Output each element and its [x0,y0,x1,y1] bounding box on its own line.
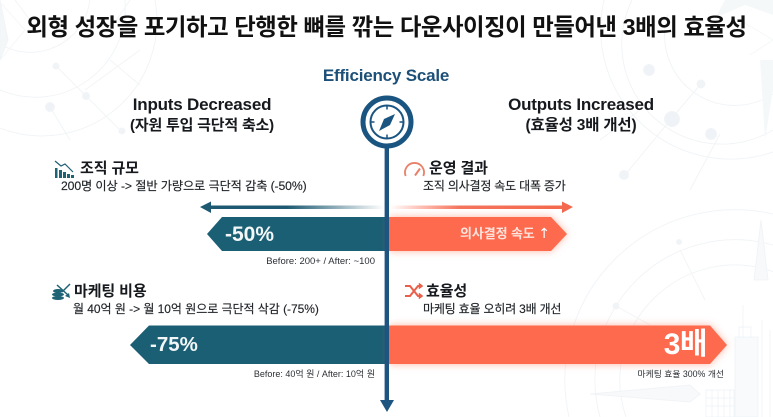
panel header: outputs increased: Outputs Increased [508,95,654,114]
caption: before and after headcount: Before: 200+ / After: ~100 [266,256,375,267]
text: marketing cost detail: 월 40억 원 -> 월 10억 원으로 극단적 삭감 (-75%) [73,302,319,316]
heading: operating results: 운영 결과 [429,160,488,177]
bar label: 3x: 3배 [664,328,707,361]
heading: organisation size: 조직 규모 [80,160,139,177]
title: 외형 성장을 포기하고 단행한 뼈를 깎는 다운사이징이 만들어낸 3배의 효율성 [26,14,747,40]
caption: marketing efficiency 300%: 마케팅 효율 300% 개선 [638,369,724,379]
text: organisation size detail: 200명 이상 -> 절반 가량으로 극단적 감축 (-50%) [61,179,307,193]
bar label: decision speed: 의사결정 속도 ↑ [460,226,550,242]
panel header: outputs increased: (효율성 3배 개선) [526,117,636,134]
text: operating results detail: 조직 의사결정 속도 대폭 증가 [423,179,566,193]
caption: before and after marketing cost: Before: 40억 원 / After: 10억 원 [254,369,375,379]
heading: efficiency: 효율성 [426,283,467,300]
panel header: inputs decreased: (자원 투입 극단적 축소) [130,117,274,134]
heading: marketing cost: 마케팅 비용 [74,283,147,300]
bar label: -50%: -50% [225,223,274,246]
heading: Efficiency Scale: Efficiency Scale [323,66,449,85]
panel header: inputs decreased [130,95,274,134]
panel header: inputs decreased: Inputs Decreased [133,95,271,114]
text: efficiency detail: 마케팅 효율 오히려 3배 개선 [423,302,561,316]
bar label: -75%: -75% [150,333,198,356]
panel header: outputs increased [508,95,654,134]
